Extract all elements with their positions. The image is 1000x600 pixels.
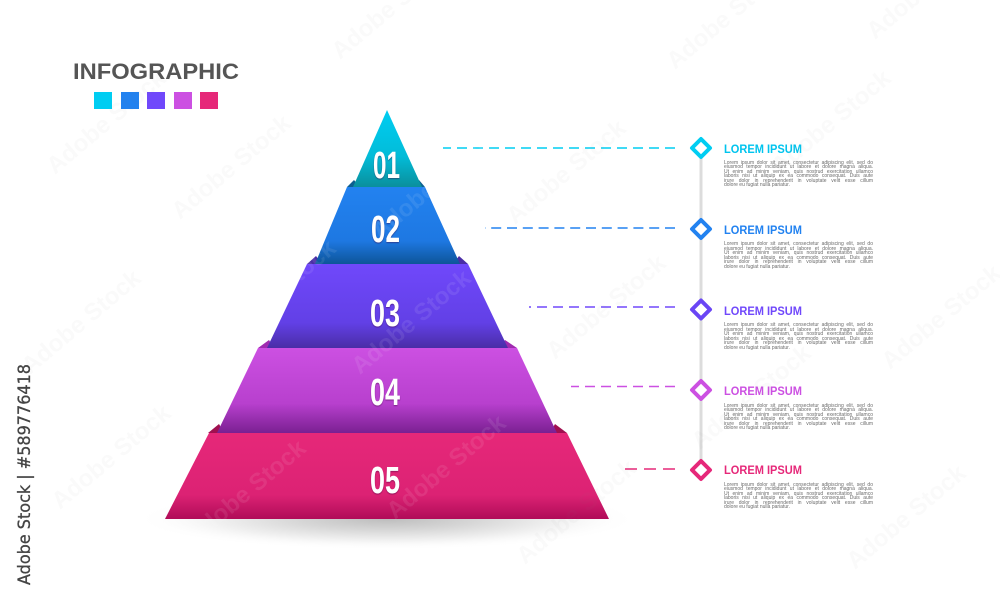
body text 3: irure dolor in reprehenderit in voluptate velit esse cillum <box>724 340 873 346</box>
tier 3 <box>267 256 508 348</box>
heading 5: LOREM IPSUM <box>724 463 802 477</box>
body text 4: dolore eu fugiat nulla pariatur. <box>724 425 790 431</box>
tier 4 <box>217 340 557 433</box>
icon: diamond 1 <box>692 139 710 157</box>
body text 4: Lorem ipsum dolor sit amet, consectetur adipiscing elit, sed do <box>724 402 873 408</box>
tier 2 <box>315 180 460 264</box>
tier 1 <box>353 110 422 187</box>
icon: diamond 5 <box>692 461 710 479</box>
body text 1: irure dolor in reprehenderit in voluptate velit esse cillum <box>724 178 873 184</box>
text: Adobe Stock <box>47 399 177 515</box>
body text 3: dolore eu fugiat nulla pariatur. <box>724 345 790 351</box>
watermarks: Adobe Stock <box>367 129 497 245</box>
tier 3: 03 <box>370 293 400 335</box>
body text 3 <box>724 322 873 351</box>
tier 4: 04 <box>370 372 400 414</box>
body text 2: irure dolor in reprehenderit in voluptate velit esse cillum <box>724 259 873 265</box>
body text 2 <box>724 241 873 270</box>
connector 5 <box>625 468 675 470</box>
text: Adobe Stock <box>842 459 972 575</box>
heading 2: LOREM IPSUM <box>724 223 802 237</box>
text: Adobe Stock <box>17 264 147 380</box>
heading 1: LOREM IPSUM <box>724 142 802 156</box>
text: Adobe Stock <box>502 114 632 230</box>
body text 1: eiusmod tempor incididunt ut labore et dolore magna aliqua. <box>724 164 873 170</box>
body text 4: Ut enim ad minim veniam, quis nostrud exercitation ullamco <box>724 412 873 418</box>
watermarks: Adobe Stock <box>382 409 512 525</box>
watermarks: Adobe Stock <box>182 434 312 550</box>
body text 1: laboris nisi ut aliquip ex ea commodo consequat. Duis aute <box>724 173 873 179</box>
body text 5: irure dolor in reprehenderit in voluptate velit esse cillum <box>724 500 873 506</box>
body text 4: irure dolor in reprehenderit in voluptate velit esse cillum <box>724 421 873 427</box>
timeline spine <box>700 148 702 470</box>
text: Adobe Stock <box>512 454 642 570</box>
connector 2 <box>485 227 675 229</box>
connector 1 <box>443 147 675 149</box>
body text 5: dolore eu fugiat nulla pariatur. <box>724 504 790 510</box>
body text 2: laboris nisi ut aliquip ex ea commodo consequat. Duis aute <box>724 255 873 261</box>
body text 5: Lorem ipsum dolor sit amet, consectetur adipiscing elit, sed do <box>724 482 873 488</box>
body text 5: Ut enim ad minim veniam, quis nostrud exercitation ullamco <box>724 491 873 497</box>
body text 4: laboris nisi ut aliquip ex ea commodo consequat. Duis aute <box>724 416 873 422</box>
watermarks: Adobe Stock <box>347 264 477 380</box>
text: Adobe Stock <box>42 64 172 180</box>
body text 5: laboris nisi ut aliquip ex ea commodo consequat. Duis aute <box>724 495 873 501</box>
watermarks <box>182 129 512 550</box>
body text 2: dolore eu fugiat nulla pariatur. <box>724 264 790 270</box>
icon: diamond 3 <box>692 300 710 318</box>
text: Adobe Stock <box>687 339 817 455</box>
tier 5 <box>165 424 609 519</box>
body text 5 <box>724 482 873 510</box>
body text 3: eiusmod tempor incididunt ut labore et dolore magna aliqua. <box>724 327 873 333</box>
body text 3: laboris nisi ut aliquip ex ea commodo consequat. Duis aute <box>724 336 873 342</box>
icon: diamond 2 <box>692 220 710 238</box>
body text 2: eiusmod tempor incididunt ut labore et dolore magna aliqua. <box>724 246 873 252</box>
text: Adobe Stock <box>167 109 297 225</box>
heading 3: LOREM IPSUM <box>724 304 802 318</box>
ground shadow <box>135 488 639 550</box>
text: Adobe Stock <box>542 249 672 365</box>
colour legend <box>94 92 218 109</box>
tier 5: 05 <box>370 460 400 502</box>
body text 5: eiusmod tempor incididunt ut labore et dolore magna aliqua. <box>724 486 873 492</box>
icon: diamond 4 <box>692 381 710 399</box>
watermarks: Adobe Stock <box>212 234 342 350</box>
tier 2: 02 <box>371 209 400 251</box>
body text 2: Lorem ipsum dolor sit amet, consectetur adipiscing elit, sed do <box>724 241 873 247</box>
body text 4: eiusmod tempor incididunt ut labore et dolore magna aliqua. <box>724 407 873 413</box>
stock credit: Adobe Stock | #589776418 <box>15 364 35 585</box>
connector 3 <box>529 306 675 308</box>
heading 4: LOREM IPSUM <box>724 384 802 398</box>
body text 1: dolore eu fugiat nulla pariatur. <box>724 182 790 188</box>
body text 3: Ut enim ad minim veniam, quis nostrud exercitation ullamco <box>724 331 873 337</box>
tier 1: 01 <box>373 145 400 187</box>
pyramid <box>165 110 609 519</box>
connector 4 <box>571 386 675 388</box>
title: INFOGRAPHIC <box>73 59 239 84</box>
body text 1: Lorem ipsum dolor sit amet, consectetur adipiscing elit, sed do <box>724 160 873 166</box>
body text 1: Ut enim ad minim veniam, quis nostrud exercitation ullamco <box>724 169 873 175</box>
body text 3: Lorem ipsum dolor sit amet, consectetur adipiscing elit, sed do <box>724 322 873 328</box>
body text 4 <box>724 402 873 431</box>
body text 2: Ut enim ad minim veniam, quis nostrud exercitation ullamco <box>724 250 873 256</box>
body text 1 <box>724 160 873 188</box>
text: Adobe Stock <box>767 64 897 180</box>
